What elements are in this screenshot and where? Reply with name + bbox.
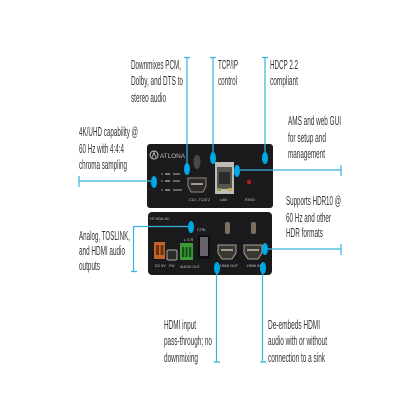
callout: 4K/UHD capability (79, 124, 157, 188)
knob (194, 155, 200, 169)
text: HDCP 2.2 (270, 57, 298, 72)
green audio connector (180, 238, 201, 269)
green audio connector: AUDIO OUT (180, 265, 201, 269)
text: TCP/IP (218, 57, 238, 72)
callout: HDR10 support: HDR formats (286, 225, 323, 240)
device: top unit (147, 144, 273, 208)
SMA connectors (225, 222, 256, 234)
callout: HDR10 support (262, 193, 341, 255)
callout: downmixes audio: Dolby, and DTS to (131, 73, 183, 88)
callout: HDCP 2.2: compliant (270, 73, 298, 88)
callout: HDMI pass-through: pass-through; no (164, 333, 212, 348)
HDMI in port: HDMI IN (247, 264, 261, 268)
icon: Atlona logo: ATLONA (160, 154, 185, 160)
text: Supports HDR10 @ (286, 193, 341, 208)
callout: de-embed HDMI audio (260, 262, 327, 365)
device: bottom unit (148, 212, 272, 275)
callout: audio outputs: Analog, TOSLINK, (79, 228, 130, 243)
callout: downmixes audio: Downmixes PCM, (131, 57, 181, 72)
CTRL port: CTRL (197, 228, 206, 232)
callout: audio outputs: and HDMI audio (79, 243, 125, 258)
callout: 4K/UHD capability: 60 Hz with 4:4:4 (79, 141, 124, 156)
callout: TCP/IP control (210, 57, 238, 164)
callout: HDR10 support: 60 Hz and other (286, 210, 331, 225)
orange power connector: DC 5V (155, 264, 166, 268)
status LEDs (161, 173, 182, 191)
USB port: FW (169, 264, 175, 268)
callout: 4K/UHD capability: chroma sampling (79, 157, 127, 172)
HDMI out port: HDMI OUT (220, 264, 239, 268)
callout: AMS and web GUI: management (288, 146, 325, 161)
green audio connector: L G R (184, 238, 194, 242)
HDMI port: C10 - TCAT2 (189, 198, 210, 202)
callout: AMS and web GUI: for setup and (288, 130, 326, 145)
callout: audio outputs (79, 221, 194, 273)
callout: HDCP 2.2 (262, 57, 298, 164)
text: audio with or without (268, 333, 327, 348)
text: AMS and web GUI (288, 113, 341, 128)
callout: HDMI pass-through: downmixing (164, 350, 198, 365)
callout: downmixes audio (131, 57, 190, 175)
callout: de-embed HDMI audio: connection to a sink (268, 350, 325, 365)
callout: de-embed HDMI audio: De-embeds HDMI (268, 317, 320, 332)
callout: AMS and web GUI (234, 113, 341, 177)
callout: audio outputs: outputs (79, 258, 100, 273)
callout: downmixes audio: stereo audio (131, 90, 166, 105)
callout: TCP/IP control: control (218, 73, 237, 88)
red LED: RSVD (245, 198, 255, 202)
LAN port: LAN (220, 198, 227, 202)
device: bottom unit: HT-HDA-SC (150, 217, 170, 221)
callout: 4K/UHD capability: 4K/UHD capability @ (79, 124, 138, 139)
callout: HDMI pass-through (164, 262, 220, 365)
callout: HDMI pass-through: HDMI input (164, 317, 196, 332)
